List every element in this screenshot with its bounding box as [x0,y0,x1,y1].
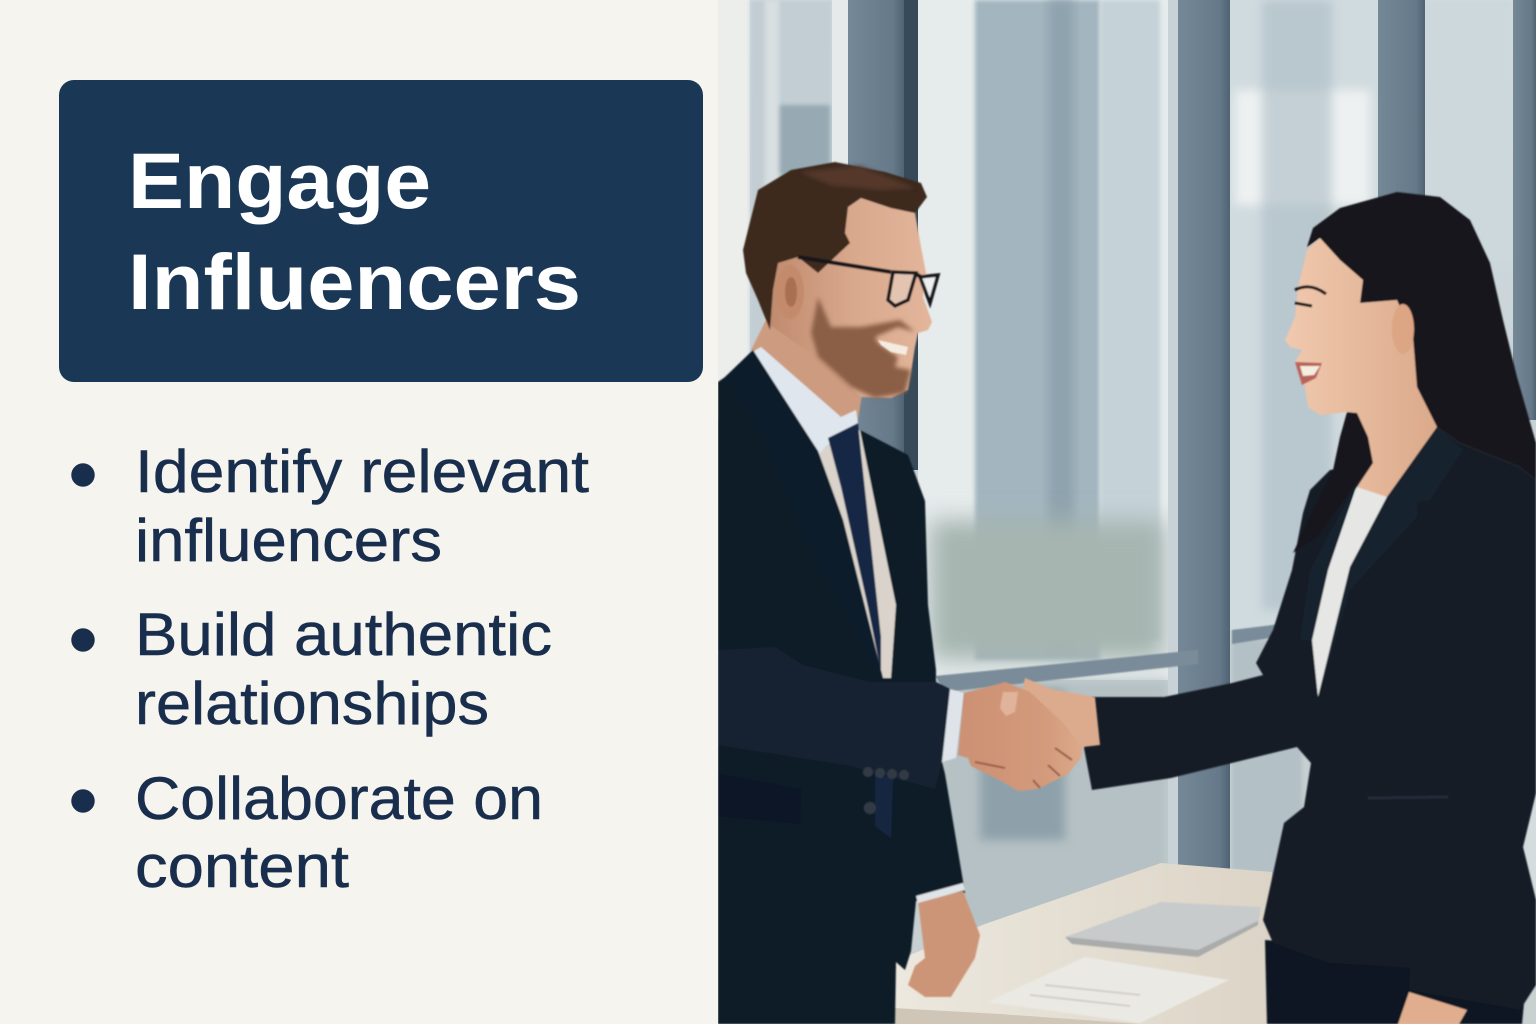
title text: Influencers [128,237,581,326]
title text [128,136,581,326]
lower tie [875,775,893,838]
jacket [718,350,965,1024]
table with laptop and paper [893,863,1272,1024]
bullet 3: content [135,833,349,900]
left hand [908,891,980,997]
pocket [718,774,801,824]
white top [1312,487,1387,697]
photo: two professionals shaking hands by an office window [718,0,1536,1024]
glasses [798,257,938,306]
face and neck [1285,238,1437,497]
pocket line [1368,797,1448,798]
far lapel [1300,490,1353,640]
bullet 1: influencers [135,507,442,574]
hair highlight [800,166,915,190]
face [770,198,932,398]
right hand [1398,992,1467,1024]
woman in dark blazer [1084,192,1536,1024]
shirt [818,430,896,678]
bullet 3 [72,765,543,900]
title banner [59,80,703,382]
handshake [958,678,1100,791]
shirt collar [751,347,858,456]
bullet 2: relationships [135,670,489,737]
tie [828,423,881,672]
bullet list [72,438,589,900]
smile [1295,362,1322,385]
beard [811,297,915,398]
ear [1392,304,1414,354]
neck [751,315,862,420]
lapel [1351,530,1370,566]
title text: Engage [128,136,431,225]
sleeve [718,647,950,789]
hair [743,162,927,330]
bullet 1: Identify relevant [135,438,589,505]
laptop [1065,902,1261,957]
left hair strand [1293,412,1373,553]
paper document [987,957,1229,1023]
ear [784,266,804,318]
left background panel [0,0,718,1024]
sleeve buttons [863,767,909,814]
right cuff [942,689,964,762]
trousers [1265,940,1528,1024]
bullet 2 [72,601,552,737]
blazer [1084,427,1536,1010]
bullet 2: Build authentic [135,601,552,668]
bullet 1 [72,438,589,574]
man in dark suit [718,162,980,1024]
eye and brow [1295,287,1326,306]
window mullions [848,0,1536,870]
left cuff [916,883,965,903]
bullet 3: Collaborate on [135,765,543,832]
office window background [718,0,1536,1024]
hair [1307,192,1536,480]
mouth [878,340,908,355]
lapel [725,352,883,678]
